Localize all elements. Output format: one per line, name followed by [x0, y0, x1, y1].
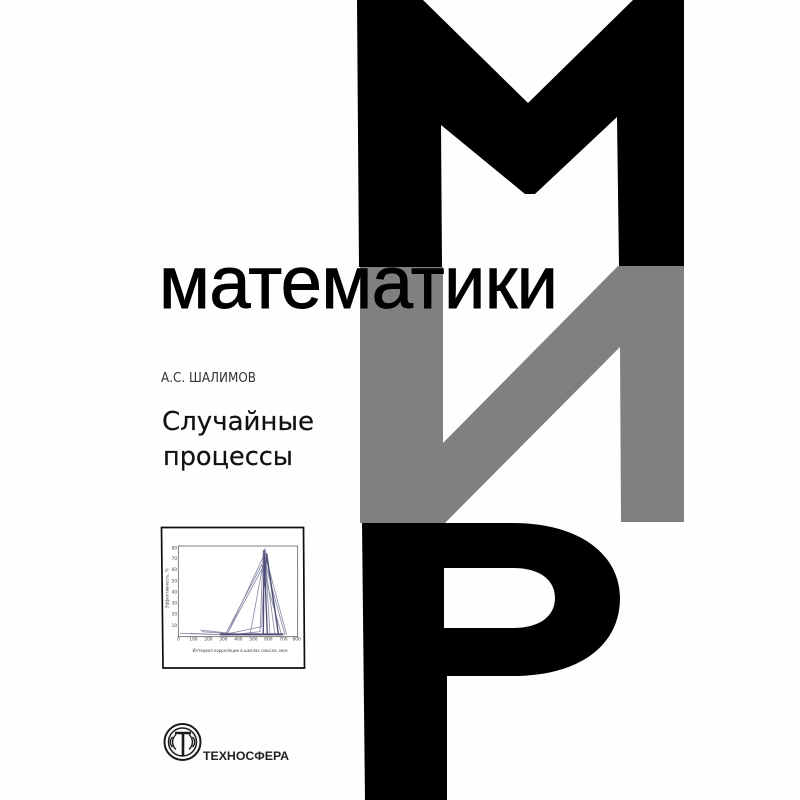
plot frame	[178, 546, 298, 637]
axis tick labels: 100	[189, 637, 198, 643]
axis tick labels: 500	[249, 637, 258, 643]
chart illustration	[162, 528, 304, 668]
axis tick labels: 80	[172, 545, 177, 551]
large letter I (grey)	[360, 266, 684, 523]
axis tick labels: 70	[172, 556, 177, 562]
publisher name: ТЕХНОСФЕРА	[203, 749, 289, 763]
axis tick labels: 0	[177, 637, 180, 643]
axis tick labels: 300	[219, 637, 228, 643]
axis tick labels: 200	[204, 637, 213, 643]
axis tick labels: 10	[172, 623, 177, 629]
book title	[162, 407, 314, 472]
series title: математики	[159, 241, 558, 324]
axis tick labels: 30	[172, 601, 177, 607]
x axis caption: Интервал корреляции в шкалах смысла, мкм	[192, 648, 287, 653]
axis tick labels: 50	[172, 578, 177, 584]
axis tick labels: 400	[234, 637, 243, 643]
author: А.С. ШАЛИМОВ	[161, 371, 256, 386]
y axis caption: Эффективность, %	[164, 568, 169, 608]
axis tick labels: 60	[172, 567, 177, 573]
large letter R	[362, 523, 620, 800]
large letter M	[357, 0, 684, 267]
axis tick labels	[172, 545, 301, 643]
axis tick labels: 600	[264, 637, 273, 643]
axis tick labels: 20	[172, 612, 177, 618]
book title: Случайные	[162, 407, 314, 437]
axis tick labels: 40	[172, 589, 177, 595]
data lines	[180, 548, 287, 635]
axis tick labels: 800	[293, 637, 301, 643]
publisher logo	[164, 724, 200, 760]
axis tick labels: 700	[279, 637, 288, 643]
book title: процессы	[163, 442, 293, 472]
